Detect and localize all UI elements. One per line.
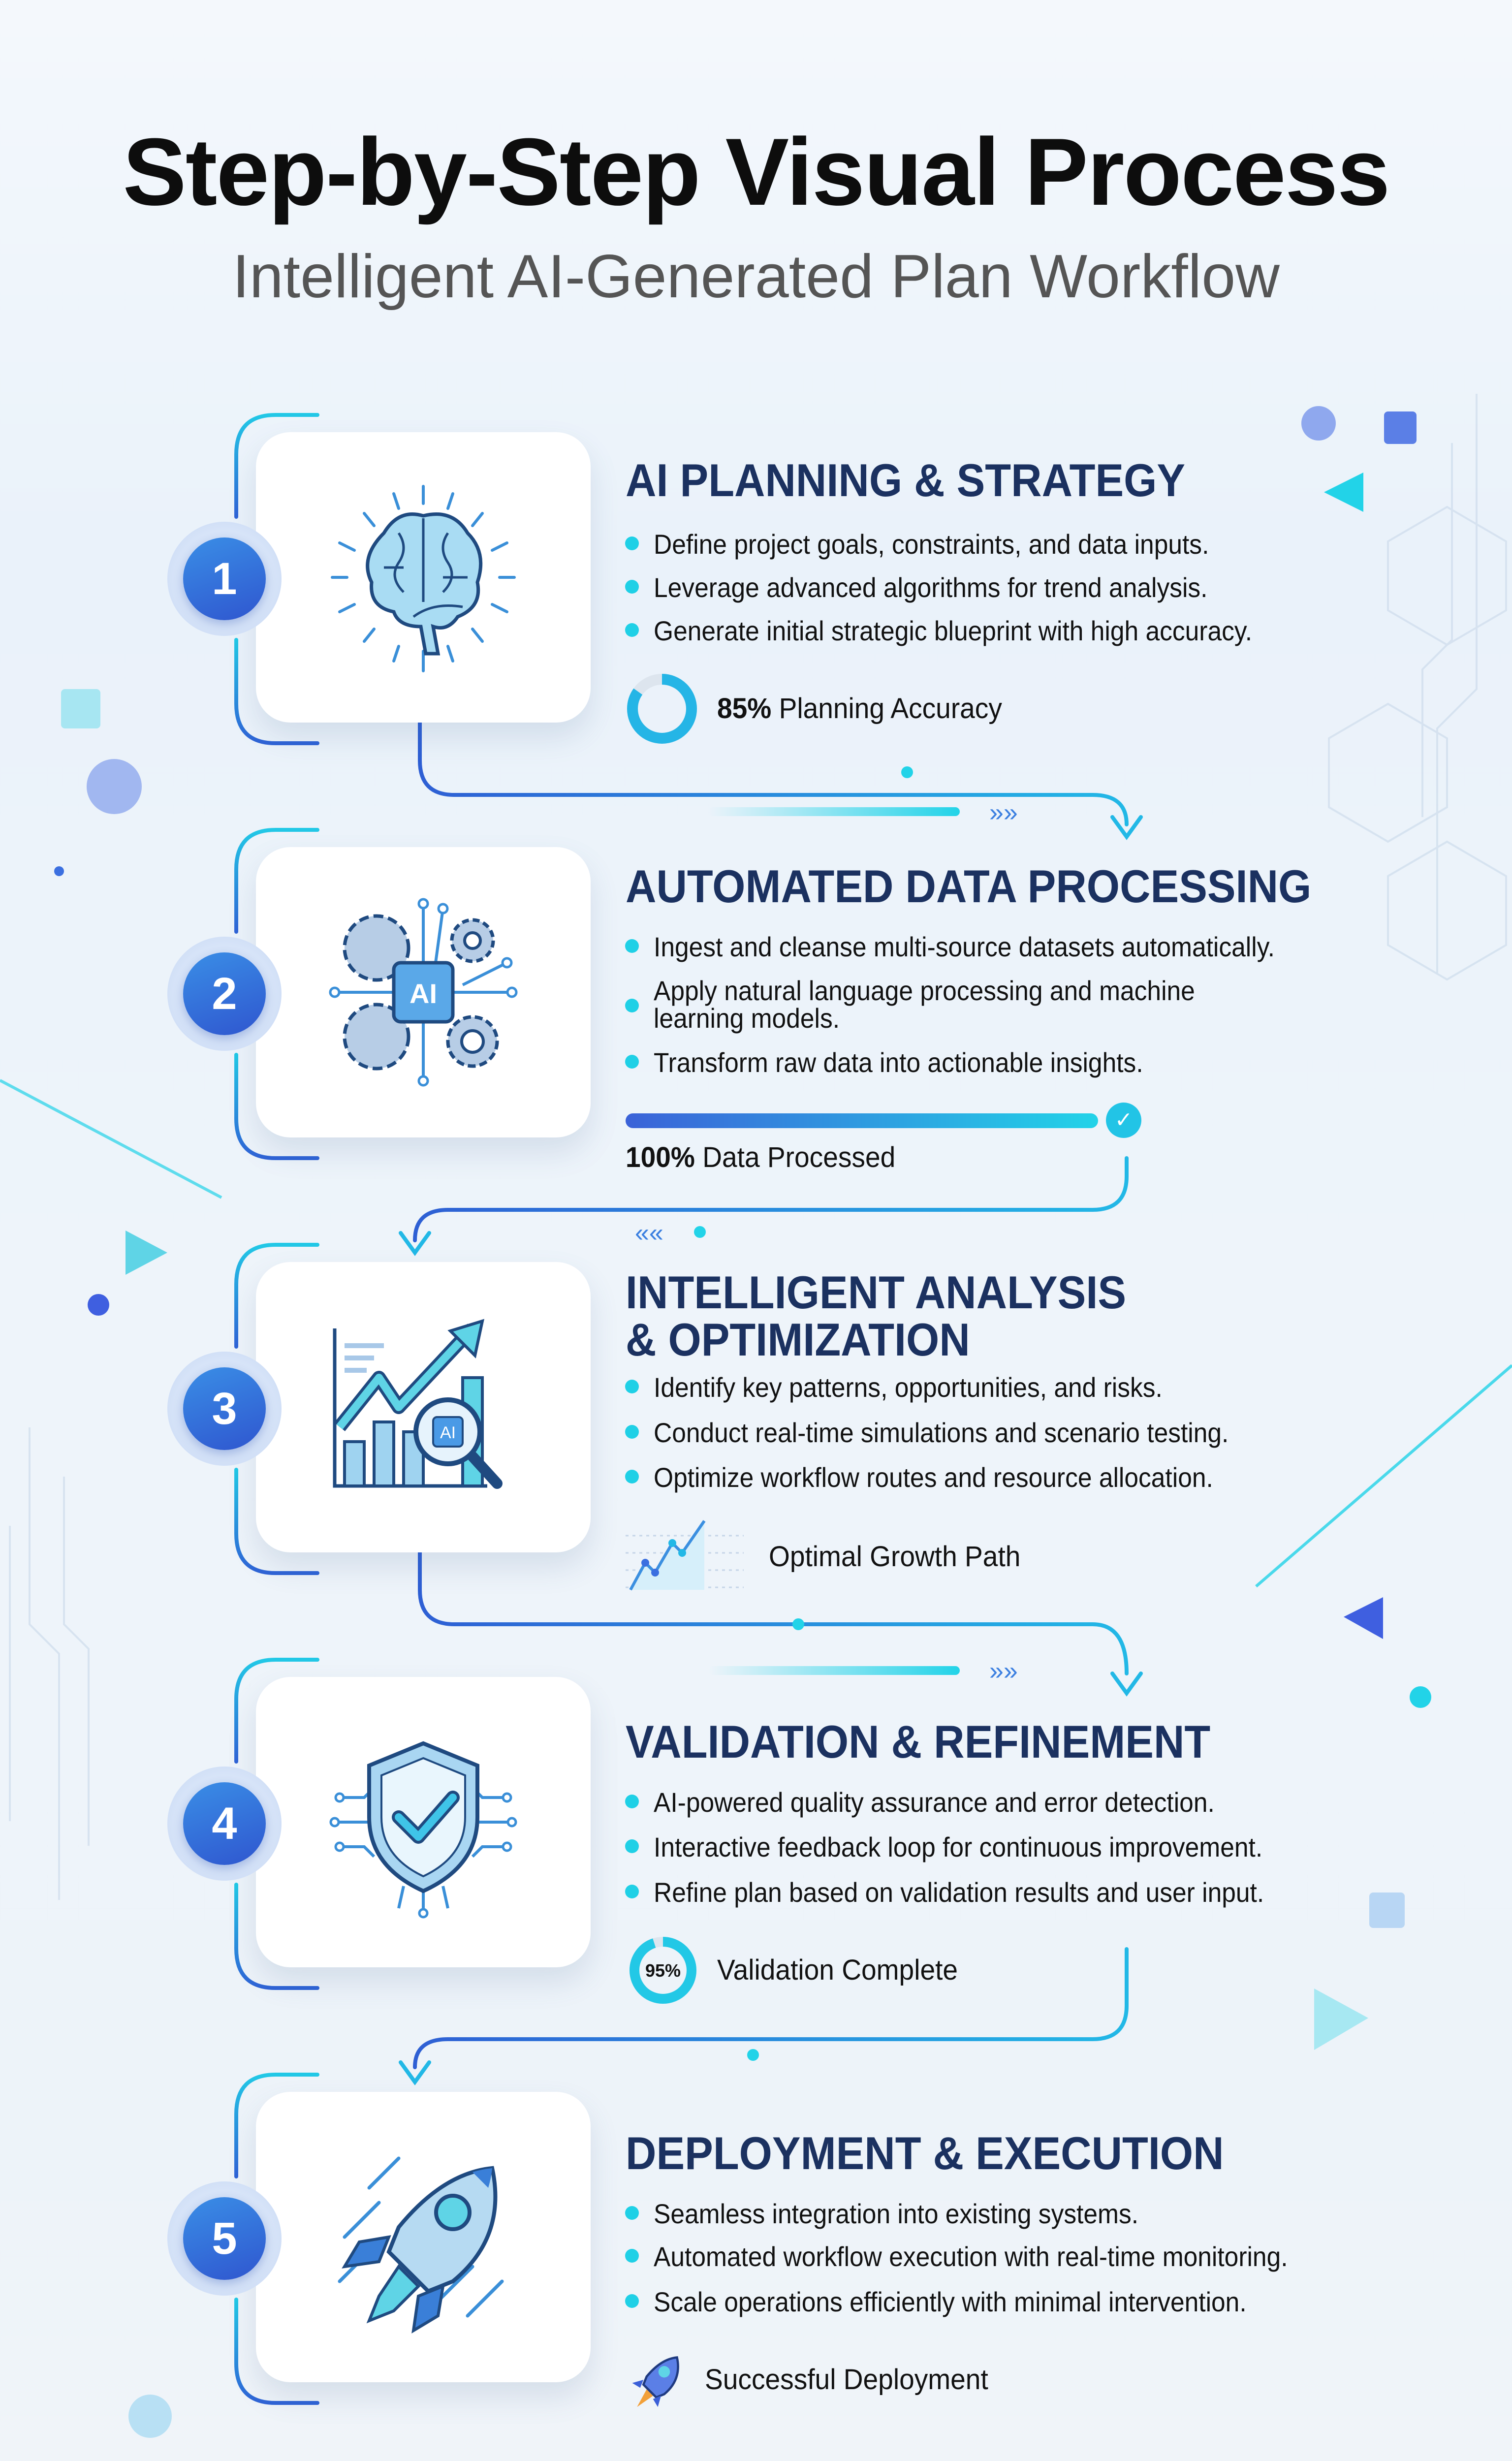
subtitle: Intelligent AI-Generated Plan Workflow xyxy=(232,243,1280,311)
number 4: 4 xyxy=(212,1798,237,1849)
stat: donut 95% xyxy=(630,1937,696,2004)
bullets 5 xyxy=(625,2198,1288,2317)
icon: gears with AI chip: AI xyxy=(410,978,437,1009)
bullets 2 xyxy=(625,931,1275,1078)
bullets 2: Apply natural language processing and machine xyxy=(654,975,1195,1006)
bullets 1: Generate initial strategic blueprint with high accuracy. xyxy=(654,615,1252,646)
number 2 xyxy=(167,937,282,1051)
step 3 card xyxy=(256,1262,591,1552)
stat text 4: Validation Complete xyxy=(717,1954,958,1986)
stat text 1: 85% Planning Accuracy xyxy=(717,693,1002,725)
icon: shield check xyxy=(330,1741,517,1919)
background decorations and connectors: «« xyxy=(635,1219,663,1247)
stat: donut 85% xyxy=(627,674,697,744)
bullets 3: Optimize workflow routes and resource allocation. xyxy=(654,1462,1213,1493)
number 1 xyxy=(167,522,282,636)
step 5 card xyxy=(256,2092,591,2382)
number 1: 1 xyxy=(212,554,237,604)
number 5: 5 xyxy=(212,2213,237,2264)
bullets 2: Ingest and cleanse multi-source datasets automatically. xyxy=(654,931,1275,962)
step 1 card xyxy=(256,432,591,723)
stat: growth chart xyxy=(626,1520,744,1591)
heading 5: DEPLOYMENT & EXECUTION xyxy=(626,2127,1224,2179)
bullets 2: Transform raw data into actionable insights. xyxy=(654,1047,1143,1078)
icon: rocket xyxy=(338,2157,504,2334)
heading 3: INTELLIGENT ANALYSIS xyxy=(626,1266,1126,1318)
number 3: 3 xyxy=(212,1384,237,1434)
stat: progress bar: ✓ xyxy=(1115,1108,1133,1132)
bullets 4: AI-powered quality assurance and error detection. xyxy=(654,1787,1215,1818)
heading 2: AUTOMATED DATA PROCESSING xyxy=(626,860,1311,912)
number 3 xyxy=(167,1352,282,1466)
bullets 3 xyxy=(625,1372,1228,1493)
icon: brain xyxy=(331,485,516,672)
heading 4: VALIDATION & REFINEMENT xyxy=(626,1716,1210,1767)
number 5 xyxy=(167,2181,282,2296)
stat text 5: Successful Deployment xyxy=(705,2364,988,2396)
number 4 xyxy=(167,1767,282,1881)
icon: gears with AI chip xyxy=(329,898,518,1087)
title: Step-by-Step Visual Process xyxy=(123,119,1389,225)
bullets 1: Define project goals, constraints, and data inputs. xyxy=(654,529,1209,560)
heading 3: & OPTIMIZATION xyxy=(626,1314,970,1365)
bullets 2: learning models. xyxy=(654,1003,840,1034)
step 2 card xyxy=(256,847,591,1137)
bullets 3: Identify key patterns, opportunities, and risks. xyxy=(654,1372,1163,1403)
step 4 card xyxy=(256,1677,591,1967)
stat text 3: Optimal Growth Path xyxy=(769,1541,1020,1573)
stat: progress bar xyxy=(626,1103,1141,1138)
icon: chart with magnifier xyxy=(333,1319,503,1489)
stat: small rocket xyxy=(632,2356,679,2407)
stat: donut 95%: 95% xyxy=(645,1960,681,1981)
bullets 5: Automated workflow execution with real-time monitoring. xyxy=(654,2241,1288,2272)
number 2: 2 xyxy=(212,969,237,1019)
background decorations and connectors: »» xyxy=(989,798,1018,827)
heading 1: AI PLANNING & STRATEGY xyxy=(626,454,1185,506)
bullets 3: Conduct real-time simulations and scenario testing. xyxy=(654,1417,1228,1448)
bullets 1 xyxy=(625,529,1252,646)
stat text 2: 100% Data Processed xyxy=(626,1141,895,1173)
heading 3 xyxy=(626,1266,1126,1365)
bullets 4 xyxy=(625,1787,1264,1908)
icon: chart with magnifier: AI xyxy=(440,1423,456,1442)
bullets 5: Scale operations efficiently with minimal intervention. xyxy=(654,2286,1247,2317)
bullets 5: Seamless integration into existing systems. xyxy=(654,2198,1138,2229)
background decorations and connectors: »» xyxy=(989,1657,1018,1685)
bullets 1: Leverage advanced algorithms for trend analysis. xyxy=(654,572,1207,603)
bullets 4: Refine plan based on validation results and user input. xyxy=(654,1877,1264,1908)
bullets 4: Interactive feedback loop for continuous improvement. xyxy=(654,1831,1262,1862)
